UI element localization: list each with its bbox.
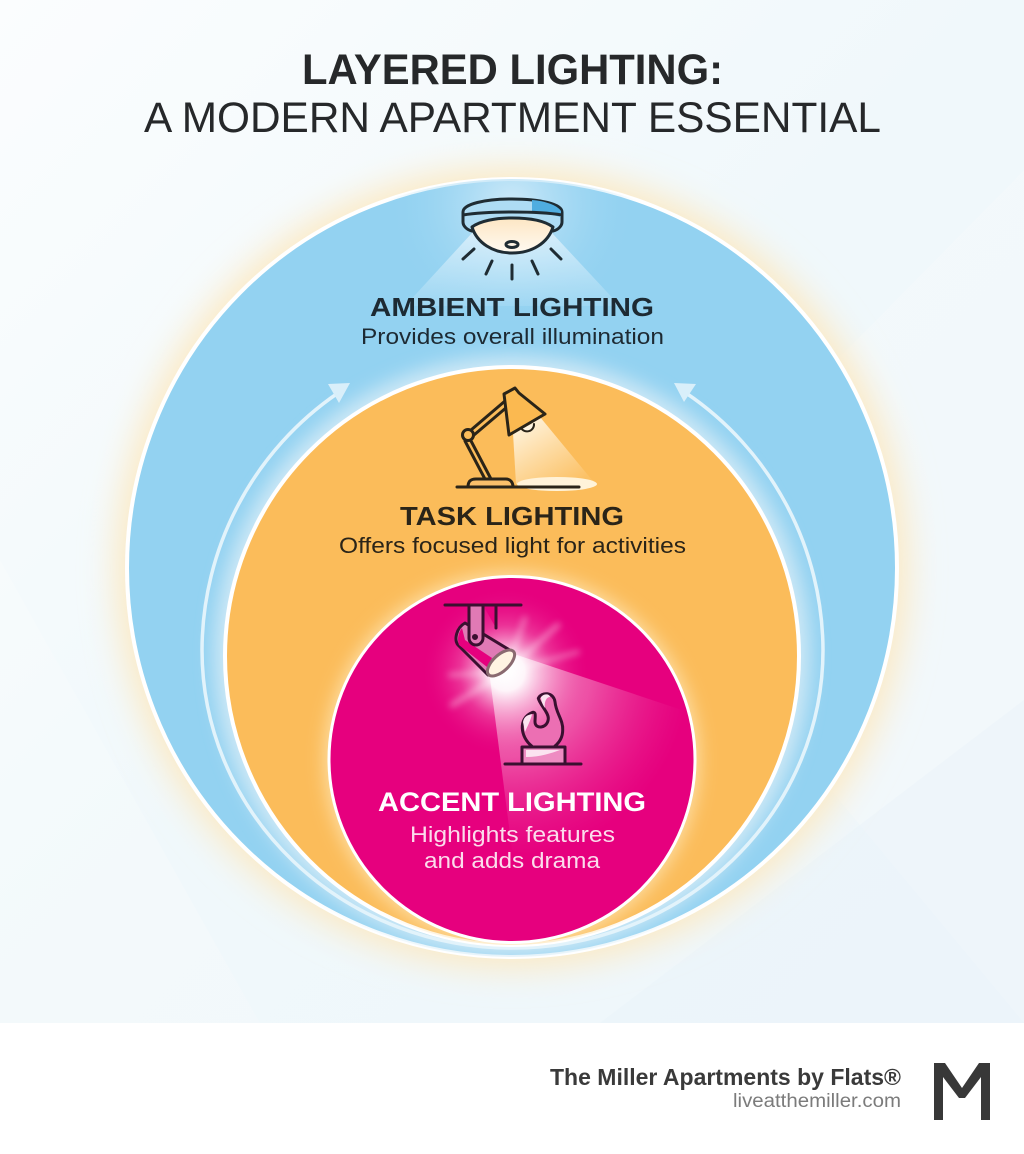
panel: ambient lighting circle — [125, 177, 899, 959]
ambient description: Provides overall illumination — [361, 324, 664, 349]
accent heading: ACCENT LIGHTING — [378, 787, 646, 817]
task lighting text — [339, 501, 686, 558]
ambient heading: AMBIENT LIGHTING — [370, 292, 654, 322]
logo: M mark — [934, 1063, 990, 1120]
website: liveatthemiller.com — [733, 1091, 901, 1112]
accent description line 1: Highlights features — [410, 822, 615, 847]
ambient lighting text — [361, 292, 664, 349]
title line 1: LAYERED LIGHTING: — [302, 46, 723, 94]
title — [144, 46, 881, 142]
arrow: right arc rising to ambient — [512, 383, 823, 948]
panel: task lighting circle — [225, 367, 799, 946]
icon: track spotlight — [445, 605, 521, 680]
icon: ceiling light — [405, 199, 620, 306]
task description: Offers focused light for activities — [339, 533, 686, 558]
title line 2: A MODERN APARTMENT ESSENTIAL — [144, 94, 881, 142]
warm glow around outer circle — [116, 168, 908, 968]
icon: flame sculpture — [505, 694, 581, 764]
panel: accent lighting circle — [329, 576, 705, 942]
icon: desk lamp — [457, 388, 597, 491]
accent description line 2: and adds drama — [424, 848, 601, 873]
accent lighting text — [378, 787, 646, 873]
footer brand — [550, 1064, 901, 1112]
brand name: The Miller Apartments by Flats® — [550, 1064, 901, 1090]
arrow: left arc rising to ambient — [202, 383, 512, 948]
task heading: TASK LIGHTING — [400, 501, 624, 531]
footer band — [0, 1023, 1024, 1154]
